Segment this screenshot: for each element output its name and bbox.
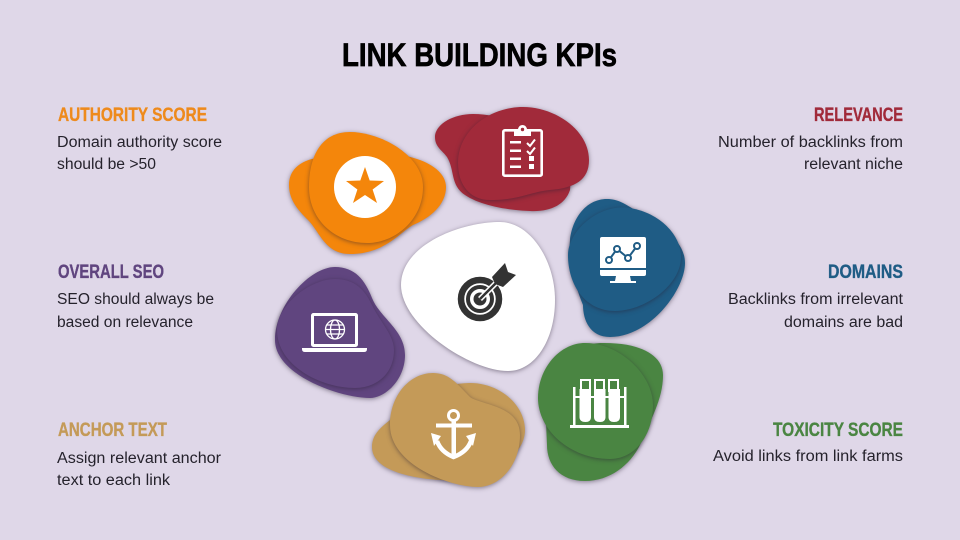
blob: toxicity green <box>538 343 663 481</box>
icon: anchor <box>431 410 476 458</box>
text block: domains: domains are bad <box>784 314 903 331</box>
text block: authority score: Domain authority score <box>57 134 222 151</box>
blob: anchor gold <box>372 373 525 487</box>
text block: authority score: AUTHORITY SCORE <box>58 105 207 126</box>
text block: anchor text: Assign relevant anchor <box>57 450 221 467</box>
icon: clipboard checklist <box>503 125 542 176</box>
text block: overall seo: SEO should always be <box>57 291 214 308</box>
icon: monitor with line chart <box>600 237 646 283</box>
text block: relevance: Number of backlinks from <box>718 134 903 151</box>
text block: toxicity score: TOXICITY SCORE <box>773 420 903 441</box>
text block: overall seo: OVERALL SEO <box>58 262 164 283</box>
blob: centre white <box>401 222 555 371</box>
text block: domains: DOMAINS <box>828 262 903 283</box>
icon: target with dart <box>461 263 516 318</box>
text block: relevance: relevant niche <box>804 156 903 173</box>
text block: overall seo <box>57 262 214 331</box>
text block: anchor text: ANCHOR TEXT <box>58 420 167 441</box>
icon: test tubes in rack <box>570 380 629 428</box>
text block: authority score <box>57 105 222 173</box>
text block: domains: Backlinks from irrelevant <box>728 291 904 308</box>
text block: anchor text <box>57 420 221 489</box>
text block: relevance <box>718 105 903 173</box>
blob: domains blue <box>568 199 685 337</box>
text block: anchor text: text to each link <box>57 472 170 489</box>
text block: authority score: should be >50 <box>57 156 156 173</box>
icon: star in circle <box>334 156 396 218</box>
text block: relevance: RELEVANCE <box>814 105 903 126</box>
title: LINK BUILDING KPIs <box>342 37 617 73</box>
text block: domains <box>728 262 904 331</box>
blob: authority score orange <box>289 132 446 254</box>
text block: overall seo: based on relevance <box>57 314 193 331</box>
blob: seo purple <box>275 267 405 398</box>
icon: laptop with globe <box>302 314 367 352</box>
blob: relevance red <box>435 107 589 211</box>
text block: toxicity score: Avoid links from link farms <box>713 448 903 465</box>
text block: toxicity score <box>713 420 903 465</box>
